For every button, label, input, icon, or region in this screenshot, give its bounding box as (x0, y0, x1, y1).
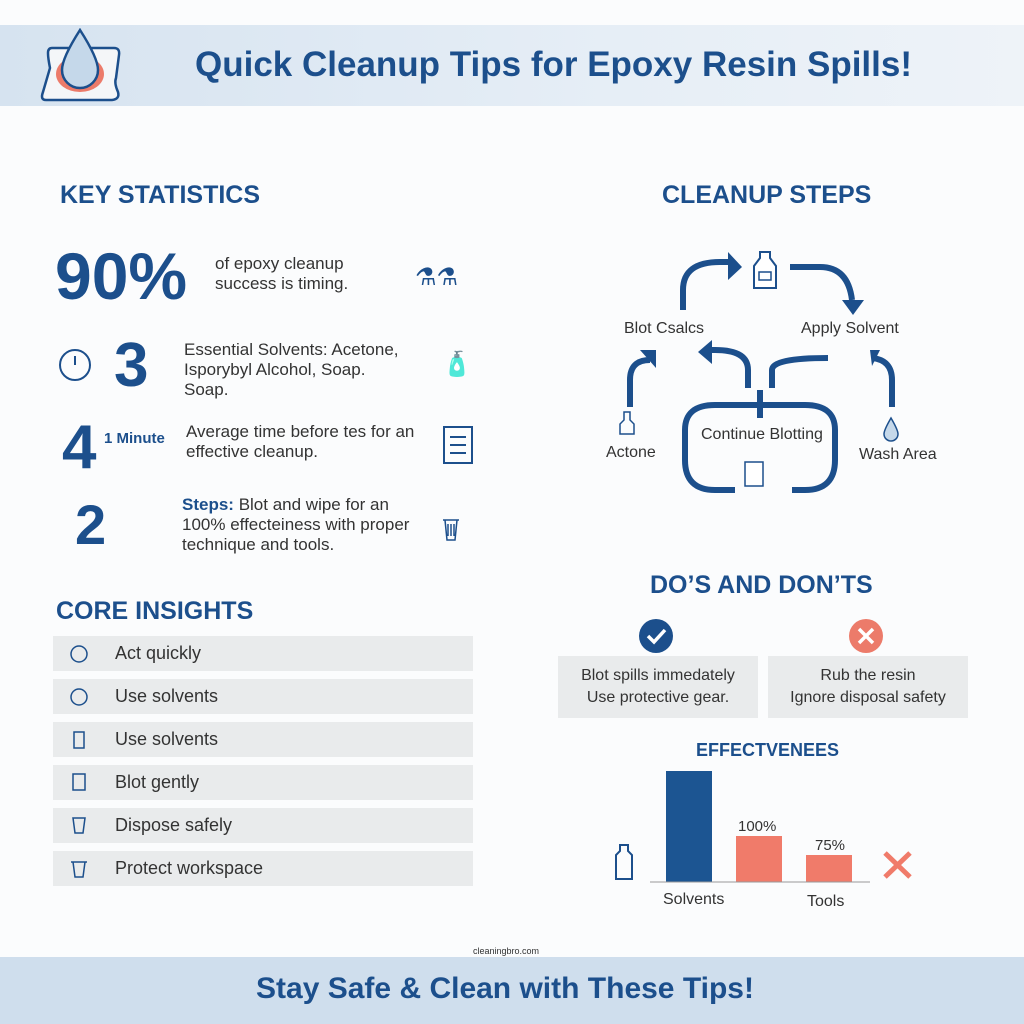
stat 90%: of epoxy cleanup (215, 254, 344, 273)
do panel (558, 619, 758, 718)
don't panel (768, 619, 968, 718)
stat 2: technique and tools. (182, 535, 334, 554)
insights list: Use solvents (115, 686, 218, 706)
stat 90% (55, 239, 458, 313)
bar chart: Solvents (663, 891, 724, 908)
stat 4: Average time before tes for an (186, 422, 414, 441)
footer band (0, 957, 1024, 1024)
icon: drop on cloth (40, 28, 120, 102)
insights list: Act quickly (115, 643, 201, 663)
insights list (53, 636, 473, 886)
footer band: Stay Safe & Clean with These Tips! (256, 972, 754, 1005)
insights list: Protect workspace (115, 858, 263, 878)
bar chart: 75% (815, 837, 845, 854)
stat 3: 🧴 (442, 351, 472, 378)
insights list: Use solvents (115, 729, 218, 749)
stat 2 (75, 493, 459, 556)
insights list: Blot gently (115, 772, 199, 792)
cleanup flow diagram: Actone (606, 444, 656, 461)
stat 3: 3 (114, 331, 148, 400)
bar chart (615, 771, 912, 910)
heading: do's and don'ts: DO’S AND DON’TS (650, 571, 873, 599)
stat 4: 1 Minute (104, 430, 165, 447)
bar chart: Tools (807, 893, 844, 910)
heading: key statistics: KEY STATISTICS (60, 181, 260, 209)
stat 2: 2 (75, 493, 106, 556)
source text: cleaningbro.com (473, 946, 539, 956)
stat 90%: success is timing. (215, 274, 348, 293)
heading: core insights: CORE INSIGHTS (56, 597, 253, 625)
cleanup flow diagram: Wash Area (859, 446, 937, 463)
stat 3: Soap. (184, 380, 228, 399)
stat 3: Isporybyl Alcohol, Soap. (184, 360, 365, 379)
cleanup flow diagram: Apply Solvent (801, 320, 899, 337)
heading: effectiveness: EFFECTVENEES (696, 740, 839, 760)
header band (0, 25, 1024, 106)
don't panel: Ignore disposal safety (790, 689, 946, 706)
bar chart: 100% (738, 818, 776, 835)
heading: cleanup steps: CLEANUP STEPS (662, 181, 871, 209)
stat 3 (59, 331, 472, 400)
cleanup flow diagram (606, 251, 937, 493)
stat 4: effective cleanup. (186, 442, 318, 461)
stat 2: 100% effecteiness with proper (182, 515, 409, 534)
cleanup flow diagram: Blot Csalcs (624, 320, 704, 337)
do panel: Use protective gear. (587, 689, 729, 706)
title: Quick Cleanup Tips for Epoxy Resin Spills! (195, 45, 912, 84)
stat 90%: 90% (55, 239, 187, 313)
do panel: Blot spills immedately (581, 667, 735, 684)
don't panel: Rub the resin (820, 667, 916, 684)
stat 4: 4 (62, 413, 96, 482)
cleanup flow diagram: Continue Blotting (701, 426, 823, 443)
icon: bottle (754, 252, 776, 288)
insights list: Dispose safely (115, 815, 232, 835)
stat 3: Essential Solvents: Acetone, (184, 340, 399, 359)
icon: flasks: ⚗⚗ (415, 264, 458, 291)
stat 2: Steps: Blot and wipe for an (182, 495, 389, 514)
stat 4 (62, 413, 473, 482)
